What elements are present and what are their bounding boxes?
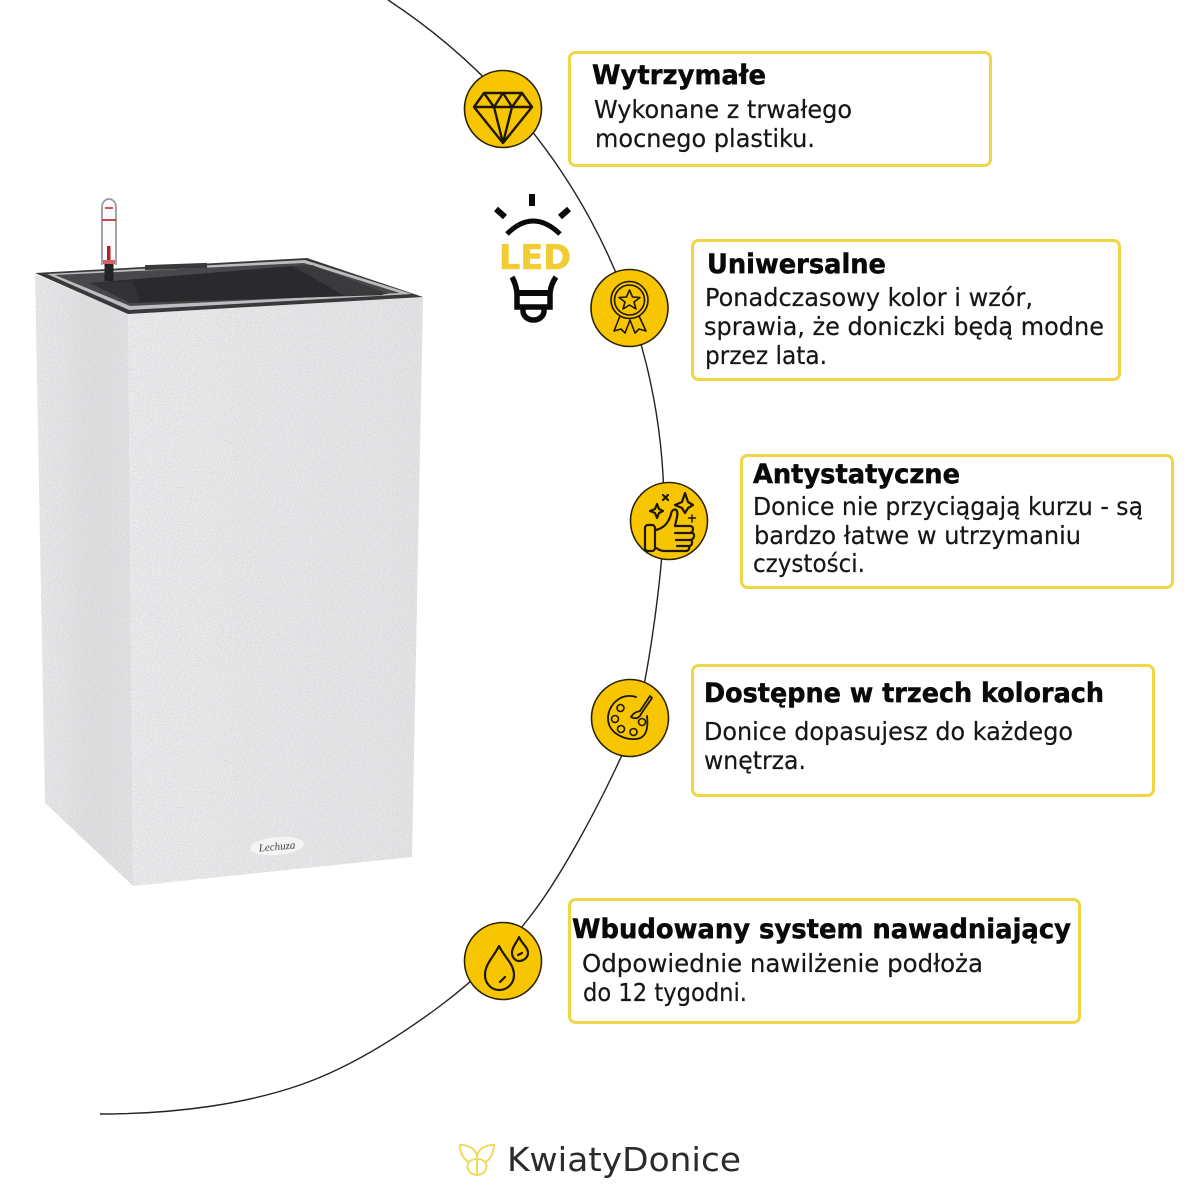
icon: award rosette xyxy=(591,270,668,346)
text block: przez lata. xyxy=(705,341,827,370)
text block: czystości. xyxy=(753,549,865,578)
heading: Uniwersalne xyxy=(707,249,886,280)
text block: Donice dopasujesz do każdego xyxy=(704,717,1073,746)
icon: thumbs up with sparkles xyxy=(630,482,708,560)
planter front face xyxy=(128,297,423,886)
text block xyxy=(753,492,1143,578)
wordmark: KwiatyDonice xyxy=(507,1140,741,1179)
panel: Antystatyczne xyxy=(742,456,1172,588)
text block xyxy=(582,949,983,1007)
text block: Odpowiednie nawilżenie podłoża xyxy=(582,949,983,978)
text block: do 12 tygodni. xyxy=(583,978,747,1007)
heading: Antystatyczne xyxy=(753,459,960,490)
panel: Dostępne w trzech kolorach xyxy=(692,666,1154,796)
text block xyxy=(594,95,852,153)
icon: LED bulb: LED xyxy=(499,238,571,278)
panel: Uniwersalne xyxy=(692,240,1120,380)
connecting arc xyxy=(100,0,664,1114)
heading: Wbudowany system nawadniający xyxy=(572,914,1071,945)
text block: Wykonane z trwałego xyxy=(594,95,852,124)
text block: Donice nie przyciągają kurzu - są xyxy=(753,492,1143,521)
text block xyxy=(704,717,1073,775)
icon: water drops xyxy=(464,922,542,1000)
text block: Ponadczasowy kolor i wzór, xyxy=(705,283,1033,312)
planter rim xyxy=(35,258,423,314)
icon: LED bulb xyxy=(496,194,571,320)
water level gauge xyxy=(102,199,116,281)
panel: Wytrzymałe xyxy=(570,52,990,166)
planter rim highlight xyxy=(47,260,412,310)
text block: wnętrza. xyxy=(704,746,806,775)
planter interior xyxy=(90,266,384,303)
brand badge: Lechuza xyxy=(257,839,296,855)
text block xyxy=(704,283,1104,370)
icon: butterfly xyxy=(460,1145,494,1175)
text block: bardzo łatwe w utrzymaniu xyxy=(754,521,1081,550)
panel: Wbudowany system nawadniający xyxy=(570,900,1080,1022)
icon: diamond xyxy=(464,70,542,148)
planter left face xyxy=(35,274,133,886)
text block: sprawia, że doniczki będą modne xyxy=(704,312,1104,341)
heading: Wytrzymałe xyxy=(592,60,766,91)
icon: paint palette xyxy=(592,680,668,756)
brand badge xyxy=(249,835,305,857)
planter speckle texture xyxy=(35,274,423,886)
text block: mocnego plastiku. xyxy=(595,124,815,153)
planter rim flat xyxy=(55,263,400,306)
product: planter xyxy=(35,199,423,886)
heading: Dostępne w trzech kolorach xyxy=(704,678,1104,709)
logo: KwiatyDonice xyxy=(460,1140,741,1179)
